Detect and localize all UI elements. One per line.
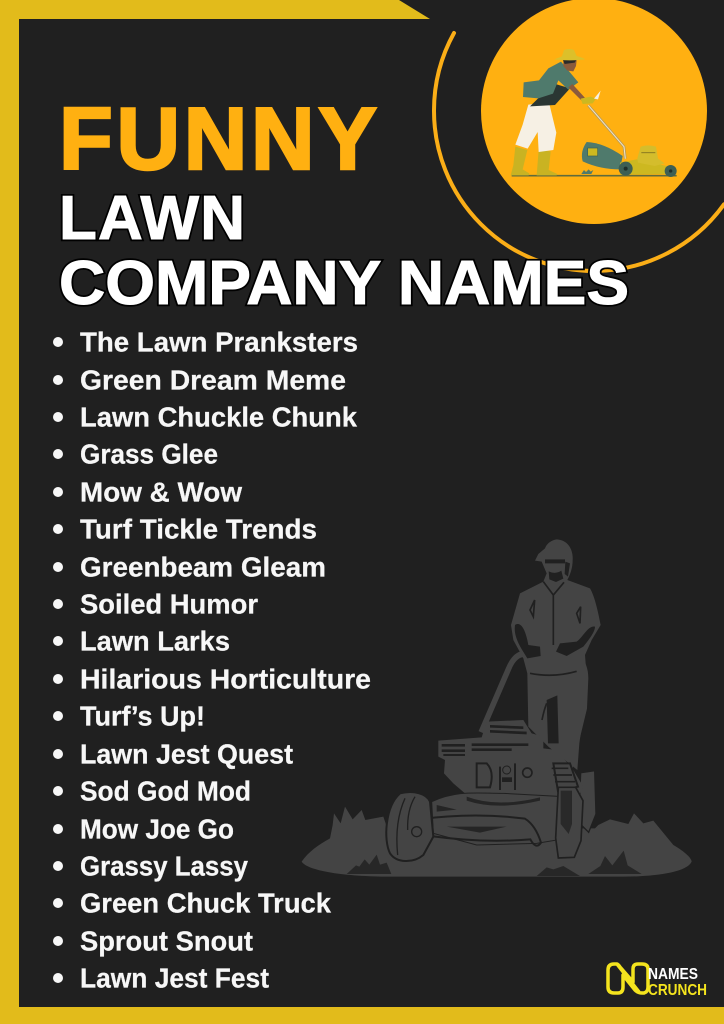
list item: Soiled Humor <box>80 588 258 619</box>
list item: Mow & Wow <box>80 476 242 507</box>
list item: Green Chuck Truck <box>80 887 331 918</box>
list item: Greenbeam Gleam <box>80 551 326 582</box>
list of funny names <box>53 326 371 993</box>
ground and grass <box>302 807 692 877</box>
title: LAWN: LAWN <box>59 184 245 253</box>
list item: Hilarious Horticulture <box>80 663 371 694</box>
list item: Grass Glee <box>80 438 218 469</box>
foreground tufts <box>347 851 642 876</box>
title: LAWN: LAWN <box>59 184 245 253</box>
list item: Lawn Jest Fest <box>80 962 269 993</box>
logo text: NAMES: NAMES <box>648 966 698 983</box>
logo icon <box>608 964 648 993</box>
list item: Sprout Snout <box>80 925 253 956</box>
decorative orange ring <box>434 33 724 271</box>
list item: Lawn Chuckle Chunk <box>80 401 357 432</box>
list item: Grassy Lassy <box>80 850 248 881</box>
list item: Turf’s Up! <box>80 700 205 731</box>
title: FUNNY: FUNNY <box>59 89 377 188</box>
logo: Names Crunch <box>608 964 707 999</box>
handle <box>481 654 585 772</box>
rear wheel <box>579 771 596 832</box>
list item: The Lawn Pranksters <box>80 326 358 357</box>
title: COMPANY NAMES: COMPANY NAMES <box>59 249 629 318</box>
list item: Lawn Larks <box>80 625 230 656</box>
list item: Mow Joe Go <box>80 813 234 844</box>
person <box>511 539 601 770</box>
title: COMPANY NAMES: COMPANY NAMES <box>59 249 629 318</box>
list item: Green Dream Meme <box>80 364 346 395</box>
mower deck <box>432 793 577 845</box>
illustration: man pushing lawn mower <box>511 49 677 177</box>
logo text: CRUNCH: CRUNCH <box>648 982 707 999</box>
left wheel <box>386 792 433 861</box>
engine <box>433 720 583 807</box>
list item: Turf Tickle Trends <box>80 513 317 544</box>
silhouette: man with push mower on grass <box>302 539 692 877</box>
orange circle <box>481 0 707 224</box>
right wheel <box>556 787 583 858</box>
list item: Sod God Mod <box>80 775 251 806</box>
list item: Lawn Jest Quest <box>80 738 293 769</box>
face and forearm shading <box>515 559 595 743</box>
